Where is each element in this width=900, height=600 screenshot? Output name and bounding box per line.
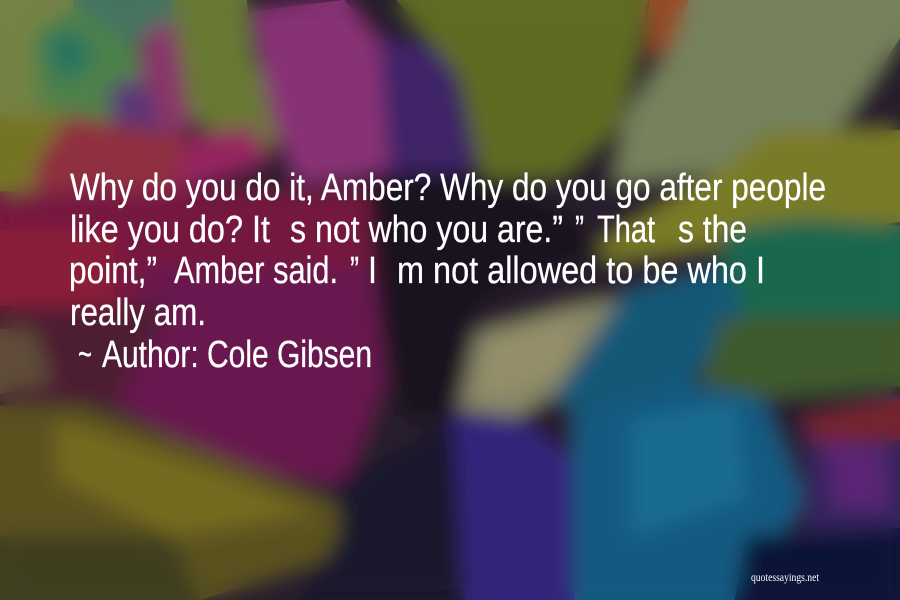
watermark: quotessayings.net — [751, 572, 820, 584]
quote text — [69, 167, 826, 376]
quote line 3 — [69, 250, 765, 292]
quote line 3: m not allowed to be who I — [397, 250, 765, 292]
author attribution: Author: Cole Gibsen — [102, 334, 372, 376]
author attribution: ~ — [78, 334, 92, 376]
quote line 2: ” — [575, 209, 584, 251]
quote line 3: point,” — [69, 250, 157, 292]
quote line 2: That — [597, 209, 655, 251]
quote line 3: Amber said. — [174, 250, 338, 292]
quote line 3: I — [368, 250, 377, 292]
quote line 2: s not who you are.” — [290, 209, 563, 251]
quote line 2 — [70, 209, 747, 251]
quote line 2: like you do? It — [70, 209, 270, 251]
quote line 3: ” — [350, 250, 359, 292]
quote line 2: s the — [678, 209, 747, 251]
quote line 4: really am. — [70, 292, 206, 334]
